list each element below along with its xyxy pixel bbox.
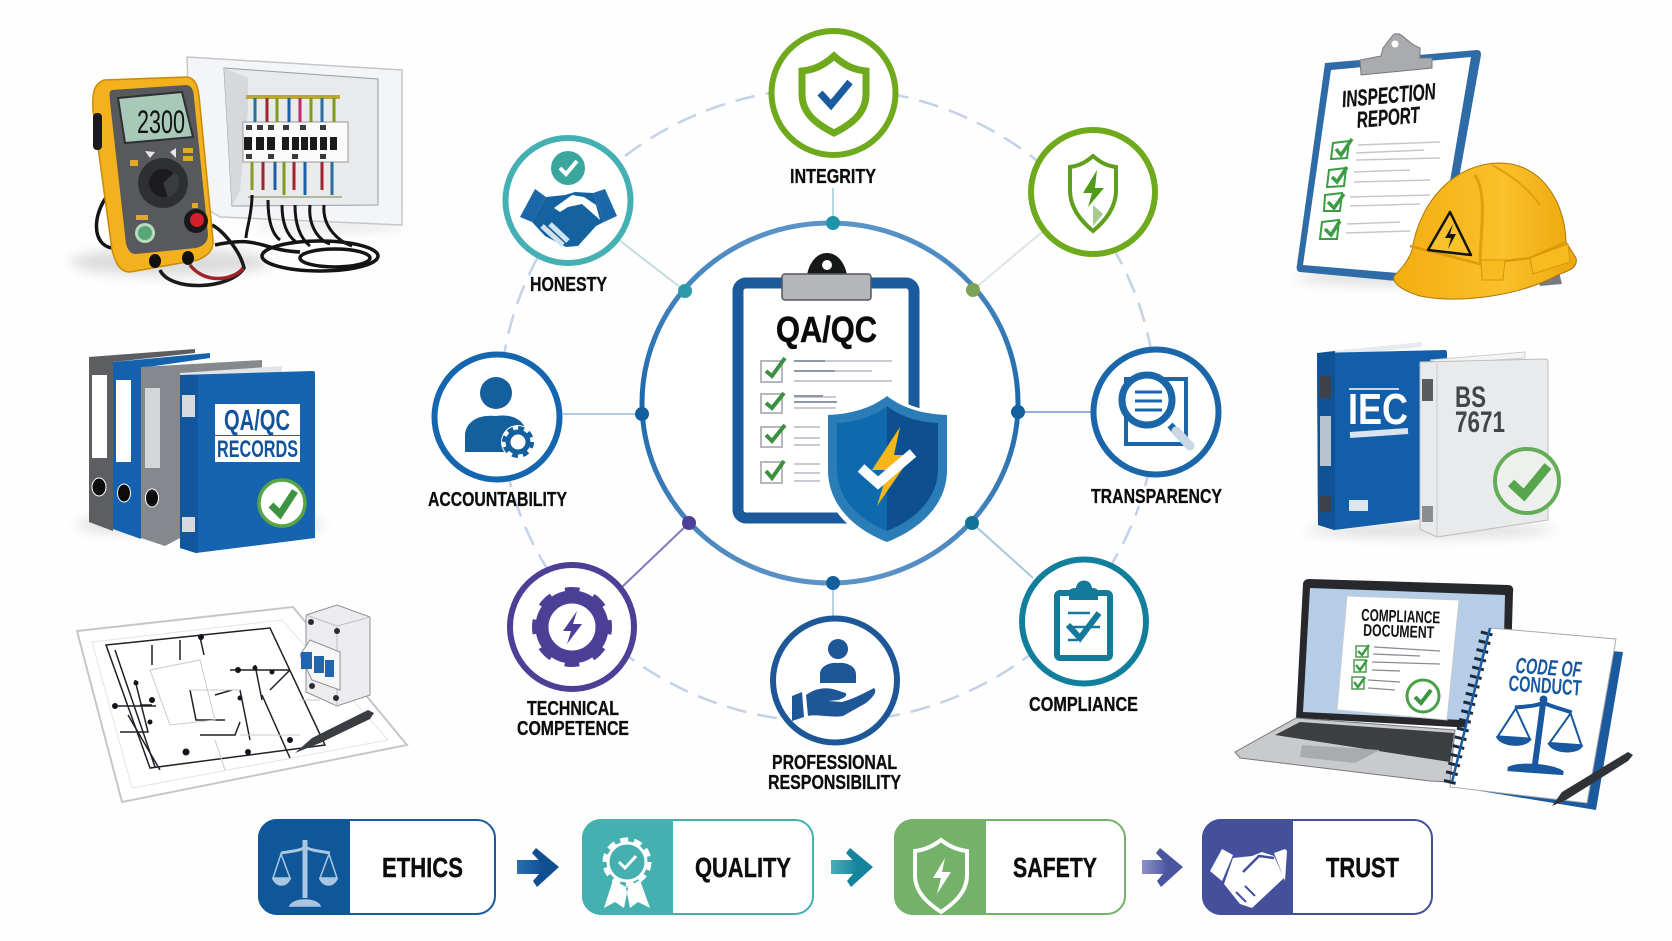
arrow 2 <box>831 848 873 887</box>
scales of justice <box>1493 692 1587 776</box>
illustration: wiring plan and breaker <box>77 605 407 802</box>
label: accountability: ACCOUNTABILITY <box>428 489 568 511</box>
icon: check badge <box>551 151 585 185</box>
label: technical competence <box>510 698 635 740</box>
laptop base <box>1235 718 1455 782</box>
arrow 1 <box>517 848 559 887</box>
central clipboard <box>738 253 951 547</box>
central ring <box>635 216 1025 590</box>
label: professional responsibility <box>768 752 902 794</box>
icon: green check badge <box>1495 449 1559 513</box>
illustration: multimeter and panel <box>70 57 405 286</box>
icon: green check badge <box>259 480 305 526</box>
arrow 3 <box>1142 848 1183 887</box>
central shield <box>823 392 951 547</box>
laptop screen <box>1296 579 1513 730</box>
checklist <box>761 358 892 483</box>
icon: person with gear <box>465 377 535 459</box>
node: transparency <box>1094 350 1218 474</box>
icon: shield <box>915 840 967 912</box>
label: transparency: TRANSPARENCY <box>1091 486 1223 508</box>
IEC book <box>1317 342 1447 530</box>
illustration: laptop with compliance document <box>1235 579 1633 810</box>
label: integrity: INTEGRITY <box>790 166 877 188</box>
label: technical competence: COMPETENCE <box>517 718 629 740</box>
label: compliance: COMPLIANCE <box>1029 694 1138 716</box>
icon: shield with check <box>802 56 866 133</box>
node: technical competence <box>510 565 634 689</box>
label: professional responsibility: PROFESSIONAL <box>772 752 897 774</box>
notebook pen <box>1552 752 1633 806</box>
code of conduct notebook <box>1449 628 1616 803</box>
distribution panel <box>187 57 402 246</box>
code of conduct notebook: CONDUCT <box>1508 671 1583 701</box>
node: compliance <box>1022 560 1146 684</box>
pen <box>295 710 374 753</box>
report heading: INSPECTION <box>1341 78 1437 112</box>
card: safety <box>894 819 1125 915</box>
compliance document: DOCUMENT <box>1363 621 1435 642</box>
icon: magnifier over document <box>1122 375 1190 446</box>
icon: rosette <box>604 840 650 908</box>
clipboard clip <box>782 253 871 300</box>
compliance document <box>1337 596 1459 720</box>
compliance document: COMPLIANCE <box>1361 606 1440 627</box>
text: quality: QUALITY <box>695 852 791 883</box>
card: ethics <box>258 819 495 915</box>
BS 7671 book: 7671 <box>1455 406 1505 439</box>
binder label: QA/QC <box>224 405 290 437</box>
dashed outer orbit <box>500 88 1156 722</box>
icon: person on open hand <box>792 639 875 721</box>
node: professional responsibility <box>773 618 897 742</box>
report heading: REPORT <box>1356 101 1422 133</box>
illustration: standards books <box>1305 342 1559 537</box>
report heading <box>1341 78 1439 134</box>
BS 7671 book <box>1420 352 1559 537</box>
icon: clipboard with check <box>1057 580 1110 658</box>
illustration: QA/QC binders <box>75 349 325 553</box>
node: safety shield <box>1031 130 1155 254</box>
hard hat <box>1394 163 1576 299</box>
label: technical competence: TECHNICAL <box>527 698 619 720</box>
illustration: inspection report and hard hat <box>1295 34 1576 299</box>
IEC book: IEC <box>1348 385 1408 434</box>
icon: handshake <box>520 189 617 247</box>
multimeter body <box>93 77 213 272</box>
node: honesty <box>506 138 630 263</box>
icon: scales <box>273 840 337 906</box>
node: accountability <box>434 354 560 480</box>
clipboard title: QA/QC <box>776 309 877 350</box>
breaker <box>300 605 370 706</box>
text: ethics: ETHICS <box>382 852 463 883</box>
hazard sign <box>1428 212 1471 255</box>
plan wiring <box>106 628 325 770</box>
node: integrity <box>772 31 896 155</box>
text: trust: TRUST <box>1326 852 1399 883</box>
label: professional responsibility: RESPONSIBILITY <box>768 772 902 794</box>
connector spokes <box>563 188 1091 616</box>
report clipboard <box>1297 34 1481 285</box>
card: quality <box>582 819 813 915</box>
text: safety: SAFETY <box>1013 852 1097 883</box>
card: trust <box>1202 819 1432 915</box>
icon: handshake <box>1210 849 1287 908</box>
icon: shield with bolt <box>1070 156 1116 231</box>
label: honesty: HONESTY <box>530 274 608 296</box>
cables <box>96 195 378 286</box>
binder label <box>215 404 300 463</box>
icon: gear with bolt <box>536 591 608 663</box>
meter reading: 2300 <box>137 104 185 140</box>
binder label: RECORDS <box>217 436 298 463</box>
notebook back <box>1450 650 1623 810</box>
code of conduct notebook: CODE OF <box>1515 653 1583 682</box>
BS 7671 book: BS <box>1455 381 1486 414</box>
